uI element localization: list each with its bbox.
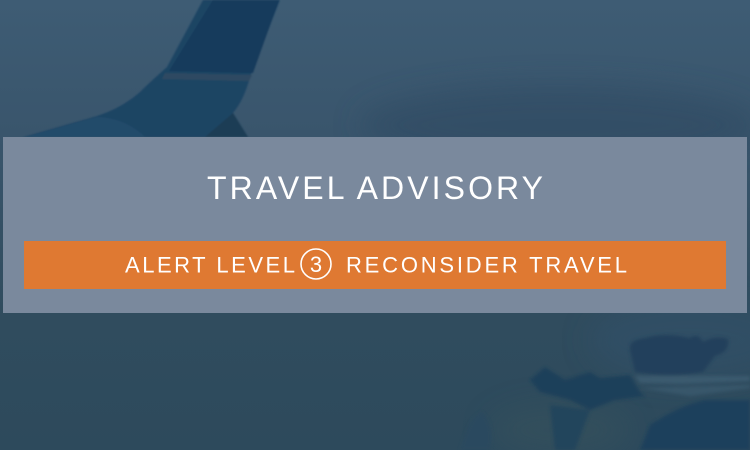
- heading: travel advisory: TRAVEL ADVISORY: [207, 170, 543, 206]
- text: reconsider travel: RECONSIDER TRAVEL: [346, 252, 627, 278]
- panel: advisory banner: [3, 137, 747, 313]
- background: aircraft tail fin: [23, 0, 280, 137]
- icon: level 3 circle: [301, 249, 331, 279]
- alert bar: [24, 241, 726, 289]
- icon: level 3 circle: 3: [310, 252, 322, 277]
- text: alert level: ALERT LEVEL: [125, 252, 295, 278]
- background: clouds: [460, 335, 750, 450]
